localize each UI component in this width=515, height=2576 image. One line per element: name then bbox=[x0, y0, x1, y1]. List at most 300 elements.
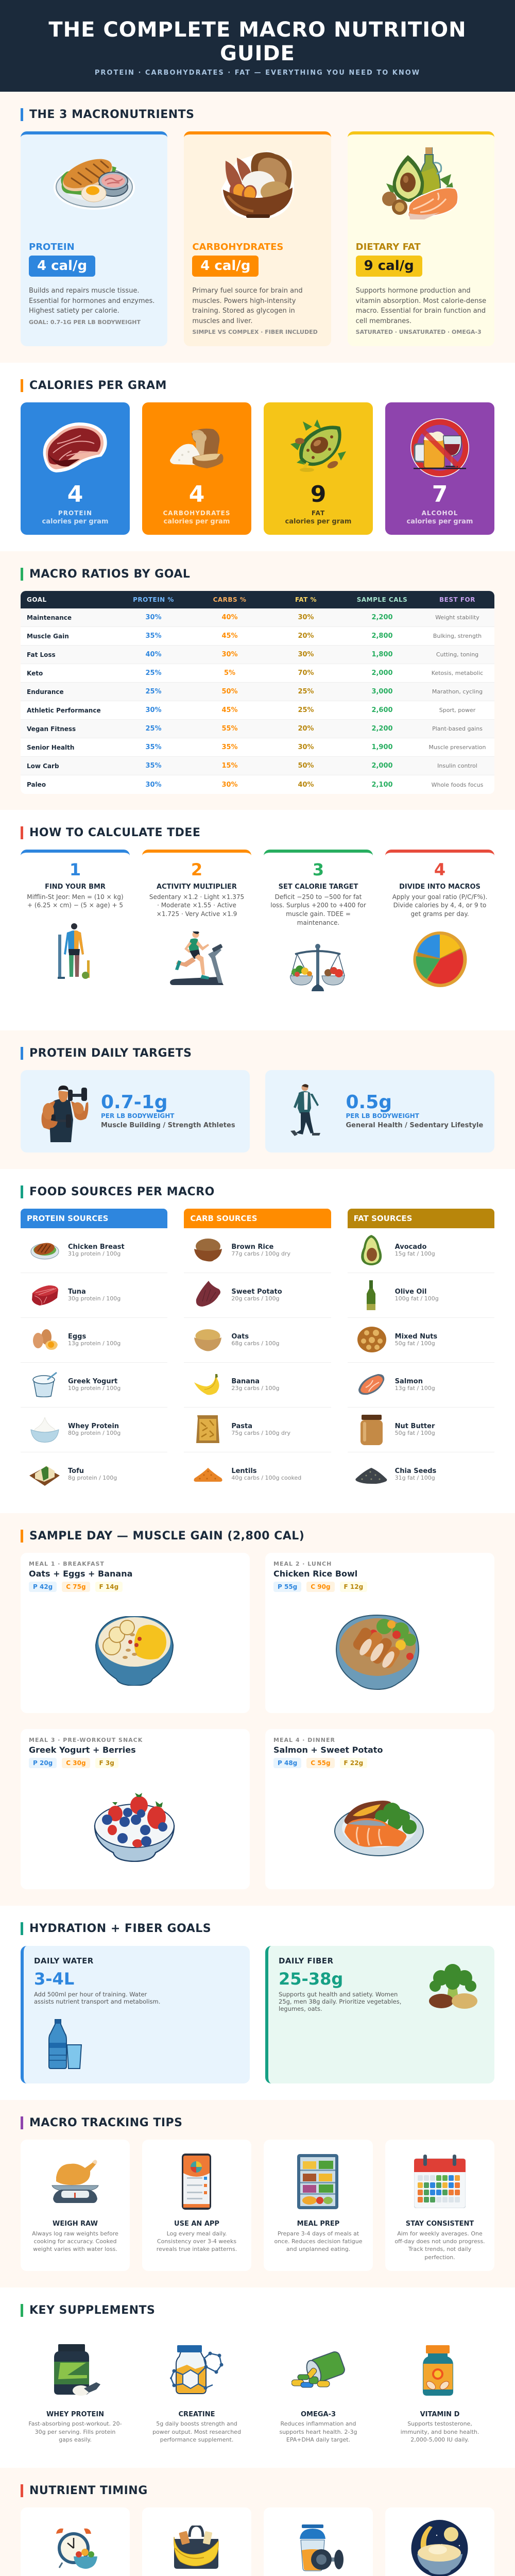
table header row: BEST FOR bbox=[439, 596, 475, 603]
row: senior health: Senior Health bbox=[27, 744, 74, 751]
panel: creatine bbox=[142, 2327, 251, 2453]
calorie badge bbox=[356, 256, 422, 277]
tip title: STAY CONSISTENT bbox=[406, 2220, 474, 2228]
macro tags: F 3g bbox=[99, 1759, 114, 1767]
step text bbox=[149, 893, 244, 918]
card name: PROTEIN bbox=[29, 242, 75, 252]
step title: SET CALORIE TARGET bbox=[279, 883, 358, 891]
panel: use an app bbox=[142, 2140, 251, 2271]
table header row: GOAL bbox=[27, 596, 47, 603]
icon: treadmill runner bbox=[170, 931, 224, 985]
panel: weigh raw bbox=[21, 2140, 130, 2271]
row: fat loss: 30% bbox=[298, 651, 314, 658]
table header row: PROTEIN % bbox=[133, 596, 174, 603]
table header row: SAMPLE CALS bbox=[357, 596, 407, 603]
macro tags: F 12g bbox=[344, 1583, 363, 1590]
description: muscles. Powers high-intensity bbox=[192, 297, 296, 305]
target unit: PER LB BODYWEIGHT bbox=[101, 1112, 174, 1120]
table header row: FAT % bbox=[295, 596, 317, 603]
name: Tuna bbox=[68, 1288, 86, 1296]
panel: step 3 bbox=[264, 850, 373, 1014]
row: paleo: 30% bbox=[145, 781, 162, 788]
section: sample day bbox=[0, 1513, 515, 1906]
row: low carb: Low Carb bbox=[27, 762, 59, 770]
target audience: General Health / Sedentary Lifestyle bbox=[346, 1121, 483, 1129]
description: macro. Essential for brain function and bbox=[356, 307, 486, 315]
supplement text bbox=[142, 2420, 251, 2444]
row: paleo: Paleo bbox=[27, 781, 46, 788]
panel: pre-workout bbox=[142, 2507, 251, 2576]
row: muscle gain: 35% bbox=[145, 632, 162, 640]
icon: walking man bbox=[290, 1084, 320, 1136]
food: nut butter bbox=[348, 1408, 494, 1452]
icon: avocado, oil, salmon, walnuts bbox=[382, 147, 458, 219]
panel: meal 4 bbox=[265, 1729, 494, 1889]
description: muscles and liver. bbox=[192, 317, 252, 325]
macro tags: P 20g bbox=[33, 1759, 53, 1767]
icon: shaker and dumbbell bbox=[299, 2524, 344, 2572]
row: low carb: 2,000 bbox=[371, 762, 393, 770]
tip text: off-day does not undo progress. bbox=[394, 2238, 485, 2245]
panel: protein calories bbox=[21, 402, 130, 535]
row: fat loss: 40% bbox=[145, 651, 162, 658]
section: the 3 macronutrients bbox=[0, 92, 515, 363]
macro tags: C 90g bbox=[311, 1583, 331, 1590]
food: salmon bbox=[348, 1363, 494, 1408]
food: eggs bbox=[21, 1318, 167, 1363]
tip text: and unplanned eating. bbox=[286, 2246, 350, 2252]
section: key supplements bbox=[0, 2287, 515, 2468]
column header bbox=[184, 1209, 331, 1228]
target audience: Muscle Building / Strength Athletes bbox=[101, 1121, 235, 1129]
row: keto: Keto bbox=[27, 670, 43, 677]
meal title: Oats + Eggs + Banana bbox=[29, 1568, 132, 1579]
row: vegan fitness: 20% bbox=[298, 725, 314, 733]
amount: 80g protein / 100g bbox=[68, 1430, 121, 1436]
tip text: Prepare 3-4 days of meals at bbox=[278, 2230, 359, 2237]
label: FAT bbox=[312, 510, 325, 517]
amount: 10g protein / 100g bbox=[68, 1385, 121, 1392]
food: chia seeds bbox=[348, 1452, 494, 1497]
macro tags: P 48g bbox=[278, 1759, 297, 1767]
icon: yogurt cup bbox=[32, 1372, 57, 1397]
panel: morning bbox=[21, 2507, 130, 2576]
panel: fat sources bbox=[348, 1209, 494, 1484]
heading: SAMPLE DAY — MUSCLE GAIN (2,800 CAL) bbox=[29, 1530, 304, 1543]
step text: + (6.25 × cm) − (5 × age) + 5 bbox=[27, 902, 123, 909]
name: Whey Protein bbox=[68, 1422, 119, 1430]
calorie badge bbox=[192, 256, 259, 277]
icon: no alcohol bbox=[410, 418, 469, 477]
description bbox=[29, 287, 154, 315]
panel: alcohol calories bbox=[385, 402, 494, 535]
heading: THE 3 MACRONUTRIENTS bbox=[29, 108, 194, 121]
row: athletic performance: 30% bbox=[145, 706, 162, 714]
name: Tofu bbox=[68, 1467, 84, 1475]
food: brown rice bbox=[184, 1228, 331, 1273]
step number: 1 bbox=[70, 860, 81, 879]
icon: mixed nuts bbox=[357, 1327, 386, 1353]
row: vegan fitness: 2,200 bbox=[371, 725, 393, 733]
tip text: Aim for weekly averages. One bbox=[397, 2230, 483, 2237]
supplement text: immunity, and bone health. bbox=[401, 2429, 479, 2435]
amount: 13g fat / 100g bbox=[395, 1385, 435, 1392]
food: banana bbox=[184, 1363, 331, 1408]
panel: daily water bbox=[21, 1946, 250, 2083]
amount: 23g carbs / 100g bbox=[231, 1385, 280, 1392]
label: PROTEIN bbox=[58, 510, 92, 517]
tip text: perfection. bbox=[424, 2254, 455, 2261]
name: Pasta bbox=[231, 1422, 252, 1430]
supplement name: VITAMIN D bbox=[420, 2410, 459, 2418]
name: Lentils bbox=[231, 1467, 257, 1475]
panel: carb sources bbox=[184, 1209, 331, 1482]
row: keto bbox=[21, 664, 494, 683]
food: oats bbox=[184, 1318, 331, 1363]
name: Chia Seeds bbox=[395, 1467, 436, 1475]
icon: food scale bbox=[51, 2159, 99, 2204]
step title: DIVIDE INTO MACROS bbox=[399, 883, 480, 891]
supplement text: gaps easily. bbox=[59, 2436, 92, 2443]
supplement name: WHEY PROTEIN bbox=[46, 2410, 104, 2418]
heading: HOW TO CALCULATE TDEE bbox=[29, 826, 200, 839]
macro tags: F 22g bbox=[344, 1759, 363, 1767]
macro tags: P 42g bbox=[33, 1583, 53, 1590]
icon: chicken plate bbox=[54, 159, 135, 210]
description: Essential for hormones and enzymes. bbox=[29, 297, 154, 305]
row: senior health: 30% bbox=[298, 743, 314, 751]
step text: maintenance. bbox=[297, 919, 339, 926]
amount: 77g carbs / 100g dry bbox=[231, 1250, 290, 1257]
amount: 100g fat / 100g bbox=[395, 1295, 439, 1302]
row: senior health: 35% bbox=[221, 743, 238, 751]
icon: eggs bbox=[33, 1329, 58, 1350]
panel: general health target bbox=[265, 1070, 494, 1153]
icon: night bowl bbox=[411, 2520, 468, 2576]
unit: calories per gram bbox=[164, 518, 230, 526]
name: Mixed Nuts bbox=[395, 1333, 437, 1341]
description: Builds and repairs muscle tissue. bbox=[29, 287, 139, 295]
icon: whey tub bbox=[54, 2344, 100, 2396]
calorie badge bbox=[29, 256, 95, 277]
card title: DAILY WATER bbox=[34, 1956, 94, 1965]
description: vitamin absorption. Most calorie-dense bbox=[356, 297, 486, 305]
row: endurance: 3,000 bbox=[371, 688, 393, 696]
subtitle: PROTEIN · CARBOHYDRATES · FAT — EVERYTHING YOU NEED TO KNOW bbox=[95, 69, 420, 77]
card name: DIETARY FAT bbox=[356, 242, 421, 252]
food: tofu bbox=[29, 1466, 117, 1486]
heading: MACRO RATIOS BY GOAL bbox=[29, 568, 190, 581]
supplement text: 5g daily boosts strength and bbox=[156, 2420, 237, 2427]
table header row: CARBS % bbox=[213, 596, 246, 603]
step text: Mifflin-St Jeor: Men = (10 × kg) bbox=[27, 893, 124, 901]
note: SIMPLE VS COMPLEX · FIBER INCLUDED bbox=[192, 329, 318, 335]
heading: CALORIES PER GRAM bbox=[29, 379, 167, 392]
icon: fridge with containers bbox=[297, 2154, 338, 2209]
heading: PROTEIN DAILY TARGETS bbox=[29, 1047, 192, 1060]
icon: vitamin d bottle bbox=[423, 2345, 453, 2396]
row: muscle gain bbox=[21, 627, 494, 646]
panel: fat calories bbox=[264, 402, 373, 535]
macro tags: C 55g bbox=[311, 1759, 331, 1767]
macro tags: P 55g bbox=[278, 1583, 297, 1590]
description: 25g, men 38g daily. Prioritize vegetables, bbox=[279, 1998, 401, 2005]
panel: protein card bbox=[21, 131, 167, 346]
column header: FAT SOURCES bbox=[354, 1214, 412, 1223]
row: athletic performance bbox=[21, 701, 494, 720]
step number: 3 bbox=[313, 860, 324, 879]
calorie badge: 9 cal/g bbox=[364, 258, 414, 274]
icon: water bottle and glass bbox=[48, 2019, 82, 2070]
unit: calories per gram bbox=[42, 518, 108, 526]
icon: avocado bbox=[361, 1235, 382, 1265]
row: fat loss: 30% bbox=[221, 651, 238, 658]
description bbox=[34, 1991, 160, 2005]
food: greek yogurt bbox=[21, 1363, 167, 1408]
macro tags bbox=[273, 1758, 367, 1768]
description: assists nutrient transport and metabolism. bbox=[34, 1998, 160, 2005]
panel: carbohydrate calories bbox=[142, 402, 251, 535]
supplement text: 2,000-5,000 IU daily. bbox=[410, 2436, 469, 2443]
section: macro ratios by goal bbox=[0, 551, 515, 810]
panel: post-workout bbox=[264, 2507, 373, 2576]
row: vegan fitness: 25% bbox=[145, 725, 162, 733]
section: food sources per macro bbox=[0, 1169, 515, 1513]
step text: Deficit −250 to −500 for fat bbox=[275, 893, 362, 901]
description bbox=[192, 287, 303, 325]
icon: banana snack bag bbox=[173, 2526, 219, 2569]
row: paleo: Whole foods focus bbox=[432, 781, 483, 788]
icon: salmon plate bbox=[334, 1798, 424, 1857]
icon: phone app bbox=[182, 2154, 211, 2210]
heading: KEY SUPPLEMENTS bbox=[29, 2304, 155, 2317]
icon: avocado half bbox=[290, 419, 346, 472]
row: paleo: 30% bbox=[221, 781, 238, 788]
row: maintenance: 2,200 bbox=[371, 614, 393, 621]
row: athletic performance: Athletic Performance bbox=[27, 707, 101, 714]
icon: bananas bbox=[194, 1374, 219, 1395]
tip text: weight varies with water loss. bbox=[33, 2246, 117, 2252]
icon: yogurt berries bowl bbox=[94, 1793, 175, 1862]
description: Add 500ml per hour of training. Water bbox=[34, 1991, 147, 1998]
description: Supports hormone production and bbox=[356, 287, 471, 295]
food: chicken breast bbox=[21, 1228, 167, 1273]
step text: · Moderate ×1.55 · Active bbox=[157, 902, 236, 909]
value: 3-4L bbox=[34, 1969, 74, 1989]
icon: tuna steak bbox=[32, 1285, 58, 1306]
title bbox=[48, 18, 467, 65]
panel: carbohydrates card bbox=[184, 131, 331, 346]
description: training. Stored as glycogen in bbox=[192, 307, 295, 315]
macro tags bbox=[273, 1582, 367, 1592]
icon: nut butter jar bbox=[360, 1415, 383, 1445]
row: paleo: 40% bbox=[298, 781, 314, 788]
macro tags: C 30g bbox=[66, 1759, 86, 1767]
tip text: Track trends, not daily bbox=[408, 2246, 471, 2252]
section: hydration and fiber bbox=[0, 1906, 515, 2100]
icon: creatine jar bbox=[170, 2344, 224, 2395]
panel: meal prep bbox=[264, 2140, 373, 2271]
target value: 0.5g bbox=[346, 1092, 392, 1113]
name: Eggs bbox=[68, 1333, 86, 1341]
row: muscle gain: Muscle Gain bbox=[27, 633, 69, 640]
column header bbox=[21, 1209, 167, 1228]
amount: 40g carbs / 100g cooked bbox=[231, 1475, 301, 1481]
row: endurance bbox=[21, 683, 494, 701]
section: how to calculate tdee bbox=[0, 810, 515, 1030]
column header: CARB SOURCES bbox=[190, 1214, 258, 1223]
supplement text: power output. Most researched bbox=[152, 2429, 241, 2435]
icon: salmon steak bbox=[357, 1374, 385, 1395]
panel: whey protein bbox=[21, 2327, 130, 2453]
row: endurance: Endurance bbox=[27, 688, 64, 696]
icon: brown rice bowl bbox=[194, 1239, 222, 1261]
name: Olive Oil bbox=[395, 1288, 426, 1296]
tip text: Log every meal daily. bbox=[167, 2230, 227, 2237]
panel: athlete target bbox=[21, 1070, 250, 1153]
panel: meal 1 bbox=[21, 1553, 250, 1713]
column header: PROTEIN SOURCES bbox=[27, 1214, 108, 1223]
description bbox=[356, 287, 486, 325]
step text bbox=[392, 893, 487, 918]
row: endurance: 25% bbox=[145, 688, 162, 696]
row: maintenance: 40% bbox=[221, 614, 238, 621]
icon: pasta bag bbox=[196, 1415, 219, 1443]
icon: chia seeds pile bbox=[355, 1467, 388, 1484]
food: olive oil bbox=[348, 1273, 494, 1318]
meal title: Greek Yogurt + Berries bbox=[29, 1744, 136, 1755]
food: tuna bbox=[21, 1273, 167, 1318]
food: lentils bbox=[194, 1467, 301, 1482]
supplement text bbox=[385, 2420, 494, 2444]
row: fat loss: Fat Loss bbox=[27, 651, 56, 658]
row: low carb: 50% bbox=[298, 762, 314, 770]
icon: protein powder bowl bbox=[31, 1417, 59, 1443]
icon: oats bowl bbox=[194, 1329, 221, 1351]
supplement text: performance supplement. bbox=[160, 2436, 233, 2443]
step number: 2 bbox=[191, 860, 202, 879]
name: Nut Butter bbox=[395, 1422, 435, 1430]
icon: spilled capsule bottle bbox=[291, 2351, 346, 2388]
label: ALCOHOL bbox=[422, 510, 458, 517]
icon: chicken plate bbox=[31, 1243, 59, 1259]
icon: lentils pile bbox=[194, 1468, 222, 1482]
supplement text: EPA+DHA daily target. bbox=[286, 2436, 350, 2443]
row: keto: 25% bbox=[145, 669, 162, 677]
icon: muscular athlete bbox=[41, 1086, 89, 1142]
meal title: Chicken Rice Bowl bbox=[273, 1568, 357, 1579]
supplement name: OMEGA-3 bbox=[301, 2410, 336, 2418]
tip text bbox=[264, 2230, 373, 2253]
icon: body measurement bbox=[58, 923, 90, 979]
name: Sweet Potato bbox=[231, 1288, 282, 1296]
amount: 15g fat / 100g bbox=[395, 1250, 435, 1257]
icon: sweet potato bbox=[196, 1281, 220, 1307]
panel: step 4 bbox=[385, 850, 494, 1014]
row: muscle gain: 20% bbox=[298, 632, 314, 640]
row: keto: Ketosis, metabolic bbox=[432, 670, 483, 676]
amount: 68g carbs / 100g bbox=[231, 1340, 280, 1347]
tip title: MEAL PREP bbox=[297, 2220, 339, 2228]
heading: MACRO TRACKING TIPS bbox=[29, 2116, 183, 2129]
row: keto: 2,000 bbox=[371, 669, 393, 677]
panel: meal 3 bbox=[21, 1729, 250, 1889]
supplement text: Reduces inflammation and bbox=[280, 2420, 356, 2427]
supplement text: Supports testosterone, bbox=[407, 2420, 472, 2427]
tip title: WEIGH RAW bbox=[53, 2220, 98, 2228]
tip text bbox=[21, 2230, 130, 2253]
row: vegan fitness: Vegan Fitness bbox=[27, 725, 76, 733]
food: mixed nuts bbox=[348, 1318, 494, 1363]
value: 9 bbox=[311, 481, 326, 507]
row: endurance: Marathon, cycling bbox=[432, 688, 483, 695]
supplement text: 30g per serving. Fills protein bbox=[35, 2429, 115, 2435]
icon: chicken rice bowl bbox=[335, 1613, 420, 1691]
heading: FOOD SOURCES PER MACRO bbox=[29, 1185, 215, 1198]
row: fat loss bbox=[21, 646, 494, 664]
section: nutrient timing bbox=[0, 2468, 515, 2576]
macro tags: F 14g bbox=[99, 1583, 118, 1590]
heading: HYDRATION + FIBER GOALS bbox=[29, 1922, 211, 1935]
tip text: Always log raw weights before bbox=[32, 2230, 118, 2237]
row: athletic performance: 45% bbox=[221, 706, 238, 714]
panel: step 2 bbox=[142, 850, 251, 1014]
goal note: GOAL: 0.7-1G PER LB BODYWEIGHT bbox=[29, 319, 141, 326]
supplement text bbox=[264, 2420, 373, 2444]
name: Brown Rice bbox=[231, 1243, 273, 1251]
description: cell membranes. bbox=[356, 317, 411, 325]
name: Greek Yogurt bbox=[68, 1378, 117, 1385]
icon: balance scale bbox=[290, 944, 345, 991]
tip title: USE AN APP bbox=[174, 2220, 219, 2228]
name: Banana bbox=[231, 1378, 260, 1385]
icon: tofu bbox=[29, 1466, 60, 1486]
row: maintenance: 30% bbox=[145, 614, 162, 621]
meal label: MEAL 3 · PRE-WORKOUT SNACK bbox=[29, 1737, 143, 1743]
row: maintenance: 30% bbox=[298, 614, 314, 621]
step text: Apply your goal ratio (P/C/F%). bbox=[392, 893, 487, 901]
food: pasta bbox=[184, 1408, 331, 1452]
section: protein daily targets bbox=[0, 1030, 515, 1169]
row: fat loss: 1,800 bbox=[371, 651, 393, 658]
panel: omega-3 bbox=[264, 2327, 373, 2453]
row: senior health: 35% bbox=[145, 743, 162, 751]
amount: 50g fat / 100g bbox=[395, 1430, 435, 1436]
row: paleo: 2,100 bbox=[371, 781, 393, 788]
step title: FIND YOUR BMR bbox=[45, 883, 106, 891]
card title: DAILY FIBER bbox=[279, 1956, 333, 1965]
meal title: Salmon + Sweet Potato bbox=[273, 1744, 383, 1755]
food: whey protein bbox=[21, 1408, 167, 1452]
unit: calories per gram bbox=[407, 518, 473, 526]
header banner bbox=[0, 0, 515, 92]
step text bbox=[27, 893, 124, 909]
amount: 50g fat / 100g bbox=[395, 1340, 435, 1347]
amount: 31g fat / 100g bbox=[395, 1475, 435, 1481]
section: calories per gram bbox=[0, 363, 515, 551]
value: 7 bbox=[432, 481, 448, 507]
label: CARBOHYDRATES bbox=[163, 510, 231, 517]
panel: protein sources bbox=[21, 1209, 167, 1486]
value: 4 bbox=[67, 481, 83, 507]
row: fat loss: Cutting, toning bbox=[436, 651, 478, 658]
step text: Divide calories by 4, 4, or 9 to bbox=[393, 902, 486, 909]
macro tags: C 75g bbox=[66, 1583, 86, 1590]
target unit: PER LB BODYWEIGHT bbox=[346, 1112, 419, 1120]
row: muscle gain: 45% bbox=[221, 632, 238, 640]
meal label: MEAL 1 · BREAKFAST bbox=[29, 1561, 105, 1567]
name: Oats bbox=[231, 1333, 249, 1341]
